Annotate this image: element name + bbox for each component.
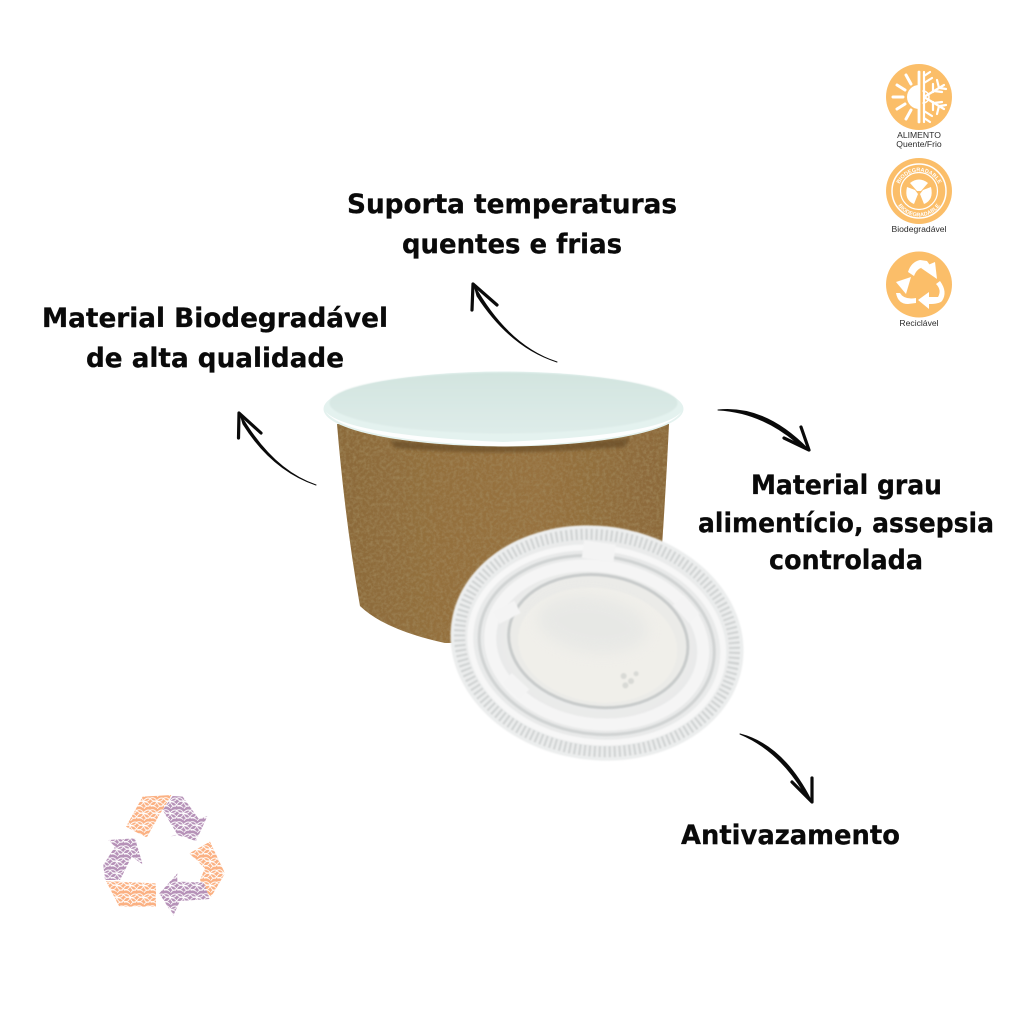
cup interior <box>330 372 678 434</box>
label: biodegradável: Biodegradável <box>892 224 947 234</box>
icon: trefoil <box>906 180 932 204</box>
icon: snowflake <box>919 72 946 122</box>
heading: antivazamento: Antivazamento <box>681 820 900 851</box>
heading: grau alimentício: controlada <box>769 545 923 576</box>
badge: biodegradável <box>886 158 952 224</box>
lid embossed mark <box>619 669 639 690</box>
heading: grau alimentício: Material grau <box>751 470 942 501</box>
orange right band <box>189 842 225 898</box>
lid ribbed edge <box>445 517 749 769</box>
label: alimento quente/frio: Quente/Frio <box>896 139 942 149</box>
product: transparent lid <box>435 507 759 779</box>
cup body <box>337 424 669 643</box>
badge: reciclável <box>886 252 952 318</box>
icon: recycle arrows <box>896 260 945 309</box>
product: kraft cup <box>324 372 684 643</box>
purple top band <box>163 796 207 841</box>
heading: temperaturas: Suporta temperaturas <box>347 189 677 220</box>
ring text: BIODEGRADABLE <box>896 168 942 184</box>
purple bottom band <box>159 873 210 916</box>
heading: temperaturas <box>347 189 677 260</box>
label: reciclável: Reciclável <box>899 318 939 328</box>
shadow under rim <box>390 438 630 452</box>
arrow: to temperaturas <box>472 284 557 362</box>
orange top band <box>126 795 172 838</box>
heading: material biodegradável: de alta qualidade <box>86 343 344 374</box>
arrow: to grau alimentício <box>718 409 809 450</box>
label: alimento quente/frio <box>896 130 942 149</box>
lid tabs <box>481 529 707 723</box>
heading: grau alimentício: alimentício, assepsia <box>698 508 994 539</box>
logo: leaf recycling symbol <box>103 795 225 916</box>
label: alimento quente/frio: ALIMENTO <box>897 130 941 140</box>
lid centre <box>500 563 697 719</box>
badge: quente e frio <box>886 64 952 130</box>
orange bottom band <box>106 881 156 907</box>
heading: material biodegradável: Material Biodegradável <box>42 303 388 334</box>
lid outer disc <box>435 507 759 779</box>
heading: temperaturas: quentes e frias <box>402 229 622 260</box>
icon: sun <box>893 75 919 119</box>
arrow: to antivazamento <box>740 734 812 802</box>
arrow: to biodegradável <box>238 413 316 485</box>
cup rim <box>324 372 684 446</box>
purple left band <box>103 838 143 880</box>
heading: material biodegradável <box>42 303 388 374</box>
heading: grau alimentício <box>698 470 994 576</box>
badge: biodegradável: BIODEGRADABLE <box>898 204 940 217</box>
